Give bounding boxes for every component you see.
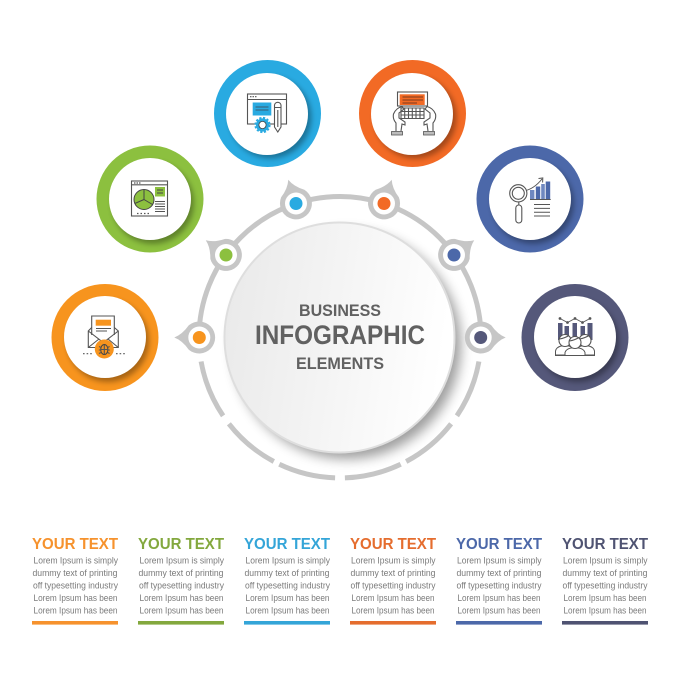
body text xyxy=(244,554,330,616)
central circle with title xyxy=(224,222,461,459)
body text: Lorem Ipsum has been xyxy=(34,604,118,616)
body text: off typesetting industry xyxy=(456,580,542,591)
outer segmented ring xyxy=(199,197,481,478)
underline xyxy=(562,621,648,625)
body text: off typesetting industry xyxy=(33,580,118,591)
badge: slate ring xyxy=(522,284,628,391)
body text: Lorem Ipsum has been xyxy=(352,604,434,616)
badge: indigo ring xyxy=(476,146,584,252)
body text: Lorem Ipsum has been xyxy=(564,604,646,616)
heading: YOUR TEXT xyxy=(244,536,331,553)
text column 4 xyxy=(350,536,437,625)
body text: Lorem Ipsum is simply xyxy=(34,554,118,566)
title: elements: ELEMENTS xyxy=(296,355,384,373)
body text: Lorem Ipsum is simply xyxy=(351,554,436,566)
heading: YOUR TEXT xyxy=(32,536,119,553)
body text: Lorem Ipsum has been xyxy=(458,592,540,603)
body text: Lorem Ipsum has been xyxy=(458,604,540,616)
body text xyxy=(350,554,436,616)
body text: off typesetting industry xyxy=(350,580,436,591)
body text: Lorem Ipsum is simply xyxy=(563,554,648,566)
underline xyxy=(32,621,118,625)
node: orange xyxy=(174,322,215,354)
heading: YOUR TEXT xyxy=(138,536,225,553)
text column 6 xyxy=(562,536,649,625)
body text xyxy=(562,554,648,616)
heading: YOUR TEXT xyxy=(562,536,649,553)
body text: dummy text of printing xyxy=(562,567,648,578)
underline xyxy=(350,621,436,625)
body text: dummy text of printing xyxy=(32,567,118,578)
node: slate xyxy=(465,322,506,354)
title: business: BUSINESS xyxy=(299,302,381,320)
icon: window, gear and pencil xyxy=(248,94,286,132)
body text xyxy=(138,554,224,616)
text column 5 xyxy=(456,536,543,625)
body text: dummy text of printing xyxy=(138,567,224,578)
icon: pie chart window xyxy=(132,181,168,216)
icon: team and chart xyxy=(555,317,595,356)
icon: mail with bug xyxy=(83,316,126,358)
node: green xyxy=(196,227,248,277)
heading: YOUR TEXT xyxy=(350,536,437,553)
body text xyxy=(456,554,542,616)
badge: orange ring xyxy=(52,284,158,391)
body text: Lorem Ipsum has been xyxy=(246,592,330,603)
body text: dummy text of printing xyxy=(350,567,436,578)
node: blue xyxy=(273,175,316,224)
title: infographic: INFOGRAPHIC xyxy=(255,320,425,350)
icon: hands on laptop xyxy=(392,92,436,135)
infographic canvas xyxy=(32,60,648,625)
body text: Lorem Ipsum is simply xyxy=(140,554,224,566)
badge: blue ring xyxy=(214,60,321,167)
body text: off typesetting industry xyxy=(562,580,648,591)
body text: off typesetting industry xyxy=(245,580,330,591)
body text: Lorem Ipsum is simply xyxy=(246,554,330,566)
body text: off typesetting industry xyxy=(139,580,224,591)
body text: Lorem Ipsum has been xyxy=(246,604,330,616)
body text: dummy text of printing xyxy=(456,567,542,578)
node: red-orange xyxy=(364,175,407,224)
underline xyxy=(456,621,542,625)
badge: red-orange ring xyxy=(359,60,466,167)
body text: Lorem Ipsum has been xyxy=(140,604,224,616)
icon: magnifier and growth chart xyxy=(510,178,551,223)
body text: Lorem Ipsum has been xyxy=(34,592,118,603)
underline xyxy=(244,621,330,625)
body text: Lorem Ipsum has been xyxy=(352,592,434,603)
body text xyxy=(32,554,118,616)
text column 3 xyxy=(244,536,331,625)
body text: dummy text of printing xyxy=(244,567,330,578)
text column 2 xyxy=(138,536,225,625)
body text: Lorem Ipsum has been xyxy=(140,592,224,603)
text column 1 xyxy=(32,536,119,625)
node: indigo xyxy=(432,227,484,277)
badge: green ring xyxy=(96,146,204,252)
underline xyxy=(138,621,224,625)
body text: Lorem Ipsum has been xyxy=(564,592,646,603)
heading: YOUR TEXT xyxy=(456,536,543,553)
body text: Lorem Ipsum is simply xyxy=(457,554,542,566)
